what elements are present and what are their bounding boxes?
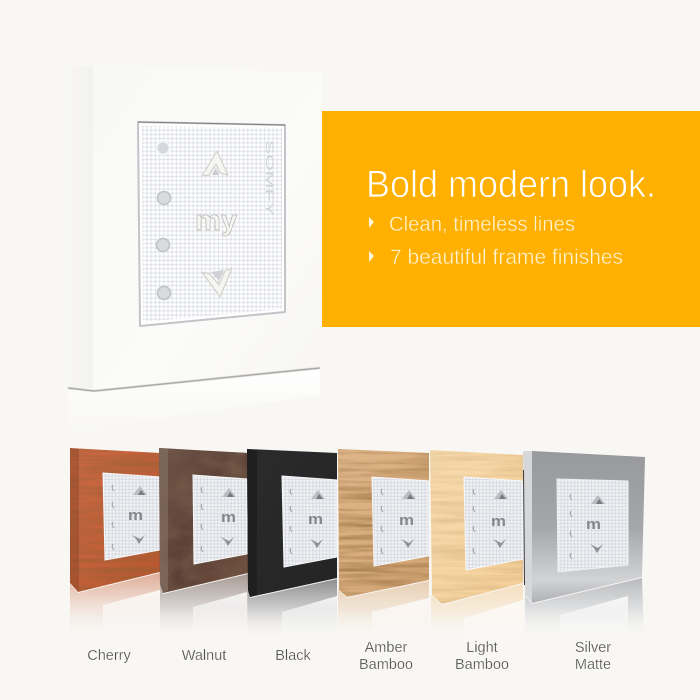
reflection xyxy=(525,578,644,640)
main switch reflection xyxy=(68,369,320,432)
frame xyxy=(159,448,248,593)
frame xyxy=(532,451,645,603)
frame xyxy=(430,450,523,604)
swatch: Silver Matte xyxy=(523,451,645,640)
keypad: m xyxy=(399,512,414,529)
brand mark: SOMFY xyxy=(263,140,275,217)
label: Silver Matte: Matte xyxy=(575,657,611,673)
keypad panel xyxy=(138,122,285,326)
swatch: Walnut xyxy=(159,448,248,640)
keypad xyxy=(103,473,160,560)
keypad xyxy=(193,475,247,564)
swatch: Cherry xyxy=(70,448,160,640)
label: Silver Matte: Silver xyxy=(575,640,611,656)
reflection xyxy=(338,581,429,640)
keypad xyxy=(464,477,523,570)
swatch: Black xyxy=(247,449,337,640)
keypad: m xyxy=(221,509,236,526)
reflection xyxy=(160,574,248,640)
keypad: m xyxy=(308,511,323,528)
frame xyxy=(70,448,160,592)
up arrow button xyxy=(202,151,228,176)
bullet: Clean, timeless lines: Clean, timeless lines xyxy=(389,213,575,236)
swatch: Light Bamboo xyxy=(430,450,523,640)
bullet list xyxy=(369,213,623,269)
orange callout panel xyxy=(322,111,700,327)
bullet: 7 beautiful frame finishes: 7 beautiful frame finishes xyxy=(390,246,623,269)
label: Light Bamboo: Bamboo xyxy=(455,657,509,673)
keypad: m xyxy=(491,513,506,530)
keypad: m xyxy=(586,516,601,533)
status lights xyxy=(156,142,170,300)
heading: Bold modern look: Bold modern look. xyxy=(366,164,656,206)
frame xyxy=(247,449,337,597)
label: Black: Black xyxy=(275,648,311,664)
keypad: m xyxy=(128,507,143,524)
down arrow button xyxy=(202,268,232,297)
label: Walnut: Walnut xyxy=(182,648,226,664)
label: Light Bamboo: Light xyxy=(466,640,498,656)
reflection xyxy=(431,584,523,640)
keypad xyxy=(372,477,429,566)
label: Amber Bamboo: Amber xyxy=(365,640,408,656)
keypad xyxy=(282,476,337,567)
reflection xyxy=(70,573,160,640)
label: Cherry: Cherry xyxy=(87,648,131,664)
main switch frame xyxy=(93,66,322,388)
swatch: Amber Bamboo xyxy=(338,449,429,640)
keypad xyxy=(557,479,628,572)
my button: my xyxy=(195,205,237,237)
frame xyxy=(338,449,429,597)
main white switch xyxy=(67,66,322,432)
label: Amber Bamboo: Bamboo xyxy=(359,657,413,673)
finish labels xyxy=(87,640,611,673)
reflection xyxy=(248,579,337,640)
